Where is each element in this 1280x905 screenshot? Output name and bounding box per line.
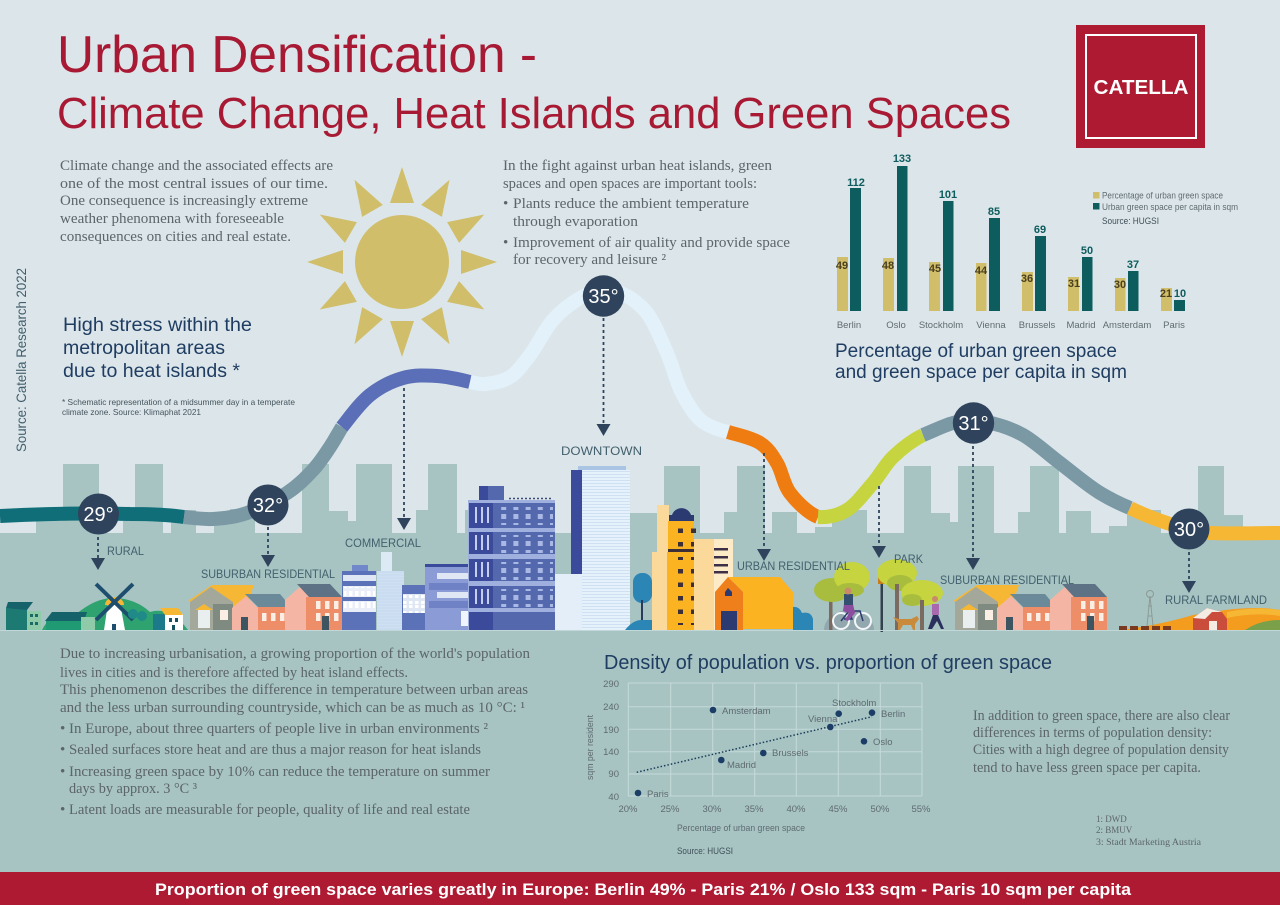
text block: density: Cities with a high degree of population density [973,741,1229,758]
zone labels: RURAL FARMLAND [1165,593,1267,607]
temperature curve [0,290,1280,533]
illustration: suburban houses right [953,584,1107,630]
zone labels: SUBURBAN RESIDENTIAL [201,567,335,581]
illustration: urban residential house [715,577,813,630]
intro text block: One consequence is increasingly extreme [60,192,308,209]
title: Climate Change, Heat Islands and Green Spaces [57,89,1011,138]
text block: heat island tools: through evaporation [513,213,638,230]
bar chart: green space: Vienna [976,320,1006,331]
scatter chart: Percentage of urban green space [677,823,805,834]
ground [0,533,1280,872]
illustration: park trees, dog and walker [877,559,944,630]
text block: heat island tools: In the fight against urban heat islands, green [503,157,772,174]
chart legend: Percentage of urban green space [1102,190,1223,200]
intro text block: Climate change and the associated effects are [60,157,333,174]
scatter chart: 20% [618,804,638,815]
text block: urbanisation: • [60,741,65,758]
scatter chart: Stockholm [832,698,876,709]
badge: 29 degrees: 29° [83,504,114,526]
arrow: downtown [596,318,610,436]
icon: sun [307,167,497,357]
arrow: suburban left [261,527,275,567]
scatter chart: Amsterdam [722,706,771,717]
logo: Catella: CATELLA [1094,77,1188,99]
arrow: park [872,486,886,558]
text block: density: In addition to green space, there are also clear [973,707,1230,724]
heading: bar chart: and green space per capita in sqm [835,362,1127,383]
badge: 30 degrees: 30° [1174,519,1204,541]
text block: density: differences in terms of population density: [973,724,1212,741]
heading: scatter chart: Density of population vs. proportion of green space [604,652,1052,674]
logo: Catella [1076,25,1205,148]
title: Urban Densification - [57,26,537,84]
illustration: commercial buildings [342,552,472,630]
chart legend: Source: HUGSI [1102,216,1159,226]
bar chart: green space: 49 [836,260,848,272]
text block: heat island tools: • [503,234,508,251]
text block: urbanisation: • [60,763,65,780]
arrow: rural [91,537,105,570]
footnotes [1096,814,1201,847]
illustration: rural village and windmill [6,584,188,630]
heading: high stress: metropolitan areas [63,338,225,359]
scatter chart [585,679,931,857]
bar chart: green space: Stockholm [919,320,963,331]
badge: 30 degrees [1168,508,1210,550]
scatter chart: 90 [608,769,619,780]
heading: high stress: due to heat islands * [63,361,241,382]
arrow: rural farmland [1182,552,1196,593]
arrow: urban residential [757,453,771,561]
text block: heat island tools: • [503,195,508,212]
text block: heat island tools: for recovery and leisure ² [513,251,666,268]
bar chart: green space: 48 [882,260,894,272]
illustration: lamp post [878,577,886,632]
bar chart: green space: Oslo [886,320,906,331]
zone labels: RURAL [107,544,144,558]
bar chart: green space: Madrid [1066,320,1096,331]
bar chart: green space: 112 [847,177,865,189]
bottom banner: Proportion of green space varies greatly in Europe: Berlin 49% - Paris 21% / Oslo 133 sqm - Paris 10 sqm per capita [155,881,1132,899]
scatter chart: 55% [911,804,931,815]
footnote: schematic: climate zone. Source: Klimaphat 2021 [62,407,201,417]
text block: urbanisation: days by approx. 3 °C ³ [69,780,197,797]
zone labels: URBAN RESIDENTIAL [737,559,850,573]
text block: urbanisation: Sealed surfaces store heat and are thus a major reason for heat islands [69,741,481,758]
text block: density: tend to have less green space per capita. [973,759,1201,776]
illustration: park tree and cyclist [814,562,874,630]
bar chart: green space: 133 [893,153,911,165]
badge: 31 degrees [953,402,994,444]
text block: urbanisation: • [60,720,65,737]
bar chart: green space: 37 [1127,259,1139,271]
bar chart: green space: 44 [975,265,988,277]
scatter chart: 140 [603,747,619,758]
scatter chart: 45% [828,804,848,815]
chart legend [1093,190,1238,226]
bar chart: green space: 36 [1021,273,1033,285]
heading: bar chart [835,341,1127,383]
text block: heat island tools: Improvement of air quality and provide space [513,234,790,251]
badge: 29 degrees [78,494,119,534]
badge: 32 degrees: 32° [253,495,283,517]
text block: density [973,707,1230,776]
scatter chart: Oslo [873,737,893,748]
arrow: suburban right [966,446,980,570]
text block: urbanisation: This phenomenon describes the difference in temperature between urban areas [60,681,528,698]
bar chart: green space: Paris [1163,320,1185,331]
footnote: schematic: * Schematic representation of a midsummer day in a temperate [62,397,295,407]
text block: heat island tools: spaces and open spaces are important tools: [503,175,757,192]
text block: heat island tools [503,157,790,268]
bar chart: green space: 10 [1174,288,1186,300]
footnotes: 2: BMUV [1096,825,1133,835]
scatter chart: 240 [603,702,619,713]
heading: high stress: High stress within the [63,315,252,336]
scatter chart: 190 [603,725,619,736]
bar chart: green space: 31 [1068,278,1080,290]
skyline silhouette [36,464,1243,533]
bar chart: green space: Brussels [1019,320,1055,331]
illustration: rural farmland [1119,590,1280,630]
source note: Source: Catella Research 2022 [13,268,29,452]
zone labels: PARK [894,552,923,566]
zone labels: SUBURBAN RESIDENTIAL [940,573,1074,587]
arrow: commercial [397,388,411,530]
bar chart: green space: 101 [939,189,957,201]
badge: 35 degrees [583,275,624,317]
badge: 31 degrees: 31° [958,413,989,435]
text block: heat island tools: Plants reduce the ambient temperature [513,195,749,212]
scatter chart: Source: HUGSI [677,846,733,857]
footnote: schematic [62,397,295,417]
zone labels: COMMERCIAL [345,536,421,550]
chart legend: Urban green space per capita in sqm [1102,202,1238,212]
scatter chart: Vienna [808,714,838,725]
scatter chart: Madrid [727,760,756,771]
bar chart: green space: 21 [1160,288,1172,300]
title [57,26,1011,138]
scatter chart: 50% [870,804,890,815]
zone labels [107,444,1267,607]
bottom banner [0,872,1280,905]
intro text block: one of the most central issues of our time. [60,175,328,192]
scatter chart: 290 [603,679,619,690]
bar chart: green space: 69 [1034,224,1046,236]
scatter chart: Brussels [772,748,809,759]
intro text block: weather phenomena with foreseeable [60,210,284,227]
illustration: suburban houses left [188,584,342,630]
illustration: downtown tower block [468,466,630,630]
text block: urbanisation: • [60,801,65,818]
text block: urbanisation: Due to increasing urbanisation, a growing proportion of the world's population [60,645,530,662]
footnotes: 3: Stadt Marketing Austria [1096,837,1201,847]
badge: 35 degrees: 35° [588,286,619,308]
intro text block: consequences on cities and real estate. [60,228,291,245]
text block: urbanisation: In Europe, about three quarters of people live in urban environments ² [69,720,488,737]
bar chart: green space: 45 [929,263,941,275]
footnotes: 1: DWD [1096,814,1127,824]
heading: bar chart: Percentage of urban green space [835,341,1117,362]
bar chart: green space: Amsterdam [1103,320,1151,331]
bar chart: green space: Berlin [837,320,861,331]
illustration: yellow towers [625,505,733,630]
text block: urbanisation: Increasing green space by 10% can reduce the temperature on summer [69,763,490,780]
text block: urbanisation: lives in cities and is therefore affected by heat island effects. [60,664,408,681]
bar chart: green space: 50 [1081,245,1093,257]
scatter chart: Paris [647,789,669,800]
badge: 32 degrees [248,484,288,526]
scatter chart: 30% [702,804,722,815]
text block: urbanisation: and the less urban surrounding countryside, which can be as much as 10 °C: ¹ [60,699,525,716]
bar chart: green space [836,153,1186,331]
scatter chart: 25% [660,804,680,815]
heading: high stress [63,315,252,382]
scatter chart: 40 [608,792,619,803]
bar chart: green space: 30 [1114,279,1126,291]
scatter chart: Berlin [881,709,905,720]
text block: urbanisation: Latent loads are measurable for people, quality of life and real estate [69,801,470,818]
street line [0,630,1280,631]
bar chart: green space: 85 [988,206,1000,218]
intro text block [60,157,333,245]
text block: urbanisation [60,645,530,818]
scatter chart: sqm per resident [585,715,596,780]
scatter chart: 35% [744,804,764,815]
scatter chart: 40% [786,804,806,815]
zone labels: DOWNTOWN [561,444,642,458]
